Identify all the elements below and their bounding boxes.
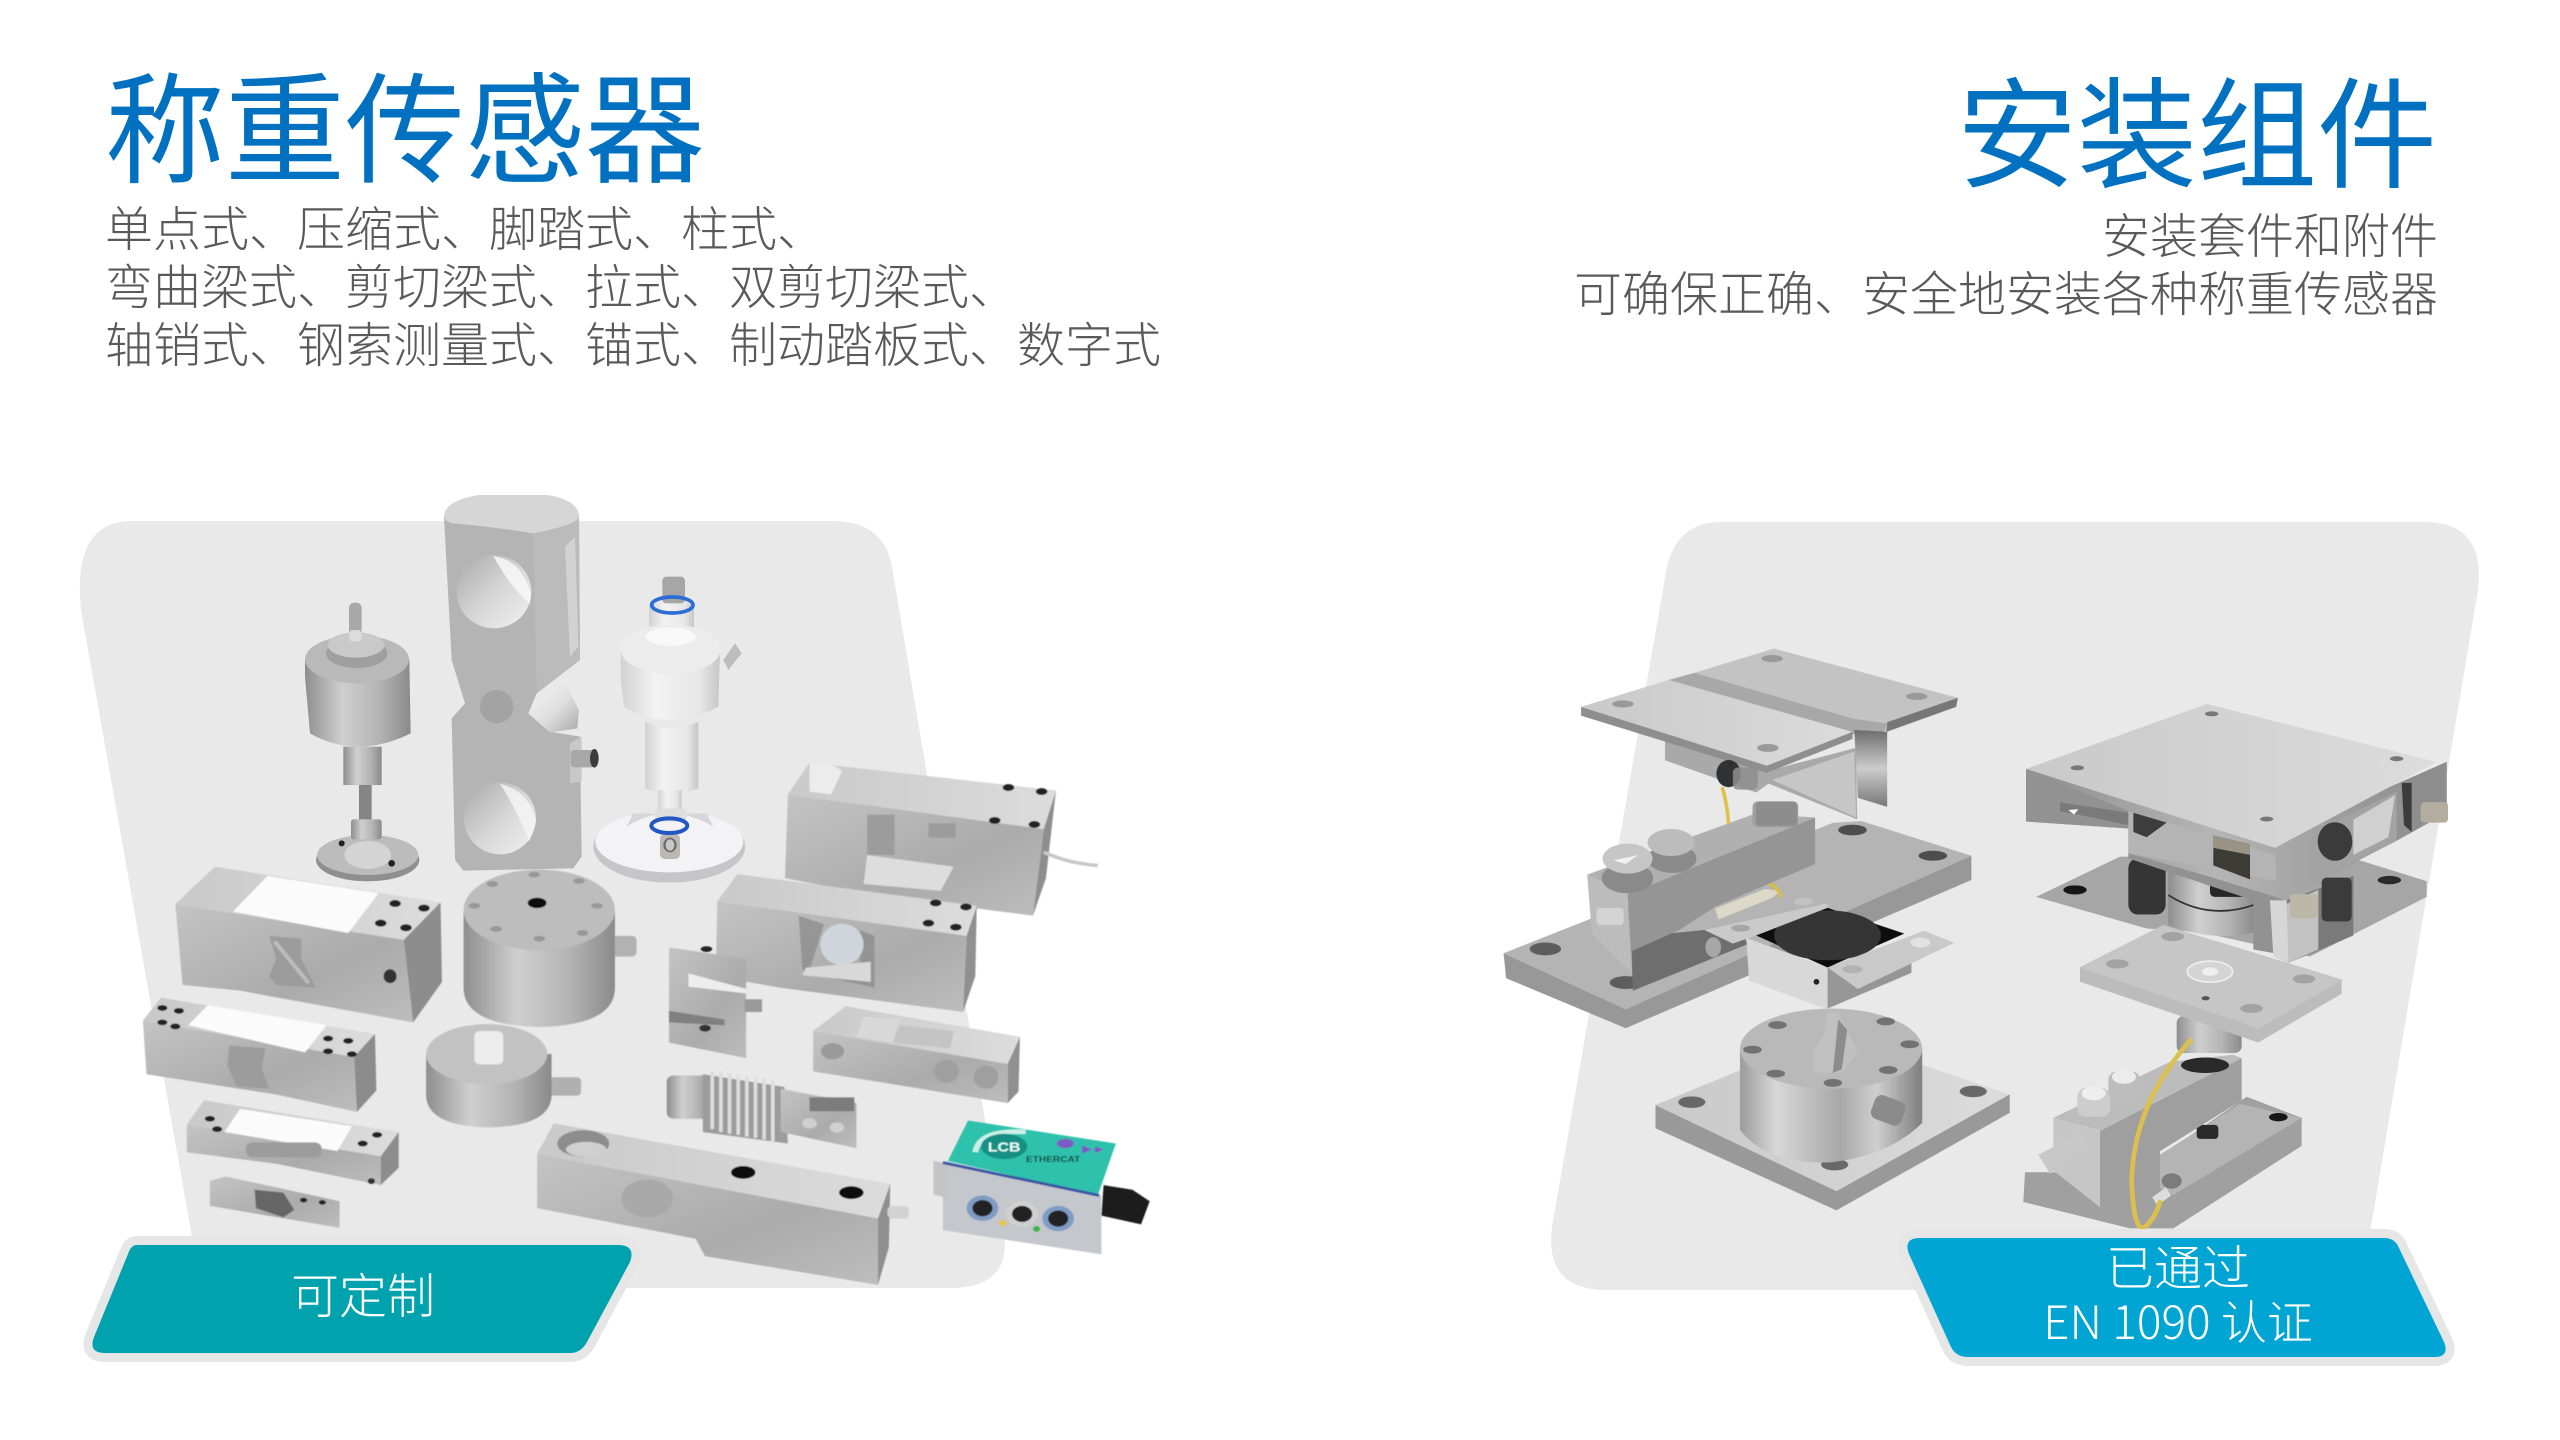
load cell: double-ended link <box>444 495 599 871</box>
badge label: certified: EN 1090 认证 <box>2043 1287 2313 1353</box>
title: mounting kits: 安装组件 <box>1957 39 2437 213</box>
kit: cylinder mount base <box>1655 1009 2010 1210</box>
load cell: S-type <box>669 946 762 1058</box>
badge label: certified <box>2043 1229 2313 1353</box>
title: load cells: 称重传感器 <box>105 34 705 208</box>
text: load cell types: 轴销式、钢索测量式、锚式、制动踏板式、数字式 <box>105 306 1161 376</box>
load cell: column left <box>305 603 419 881</box>
kit: elastomer box <box>1704 897 1954 1009</box>
load cell: mini block <box>187 1100 399 1185</box>
badge: EN 1090 certified <box>1907 1238 2446 1357</box>
load cell: tiny block <box>210 1176 340 1228</box>
kit: beam mount base plate <box>1504 801 1971 1028</box>
load cell: small compression disc <box>426 1024 581 1127</box>
mounting kit: left stack <box>1504 649 2010 1210</box>
digital junction box: ETHERCAT <box>1026 1155 1081 1164</box>
load cell: large compression cylinder <box>464 869 637 1027</box>
text: mounting kits description <box>1574 197 2438 325</box>
text: mounting kits description: 安装套件和附件 <box>2102 197 2438 267</box>
load cell: shear beam <box>813 1006 1020 1103</box>
text: load cell types: 弯曲梁式、剪切梁式、拉式、双剪切梁式、 <box>105 248 1017 318</box>
load cell: single point large <box>785 763 1098 916</box>
digital junction box: LCB <box>988 1141 1020 1155</box>
text: load cell types <box>105 190 1161 376</box>
load cell: single point medium <box>716 874 977 1012</box>
top load cells: column, link and hygienic column <box>305 495 745 883</box>
kit: top square mount <box>2026 704 2448 964</box>
text: load cell types: 单点式、压缩式、脚踏式、柱式、 <box>105 190 825 260</box>
mounting kit: right stack <box>2023 704 2448 1228</box>
panel: mounting kits background <box>1551 522 2479 1290</box>
badge label: customisable: 可定制 <box>291 1257 435 1327</box>
kit: top plates with bracket <box>1581 649 1958 826</box>
kit: small top plate <box>2080 925 2342 1042</box>
load cell: long shear beam <box>537 1123 909 1285</box>
badge label: certified: 已通过 <box>2106 1229 2250 1299</box>
load cell: hygienic white column <box>593 577 745 883</box>
remaining load cell collection <box>143 763 1150 1285</box>
digital junction box <box>933 1120 1150 1254</box>
text: mounting kits description: 可确保正确、安全地安装各种称重传感器 <box>1574 255 2438 325</box>
kit: bottom beam mount <box>2023 1016 2302 1228</box>
badge: customisable <box>92 1245 631 1353</box>
panel: load cells background <box>80 521 1005 1288</box>
load cell: platform block with white label <box>175 867 442 1022</box>
load cell: small platform block <box>143 998 376 1112</box>
load cell: bellows <box>667 1071 856 1148</box>
